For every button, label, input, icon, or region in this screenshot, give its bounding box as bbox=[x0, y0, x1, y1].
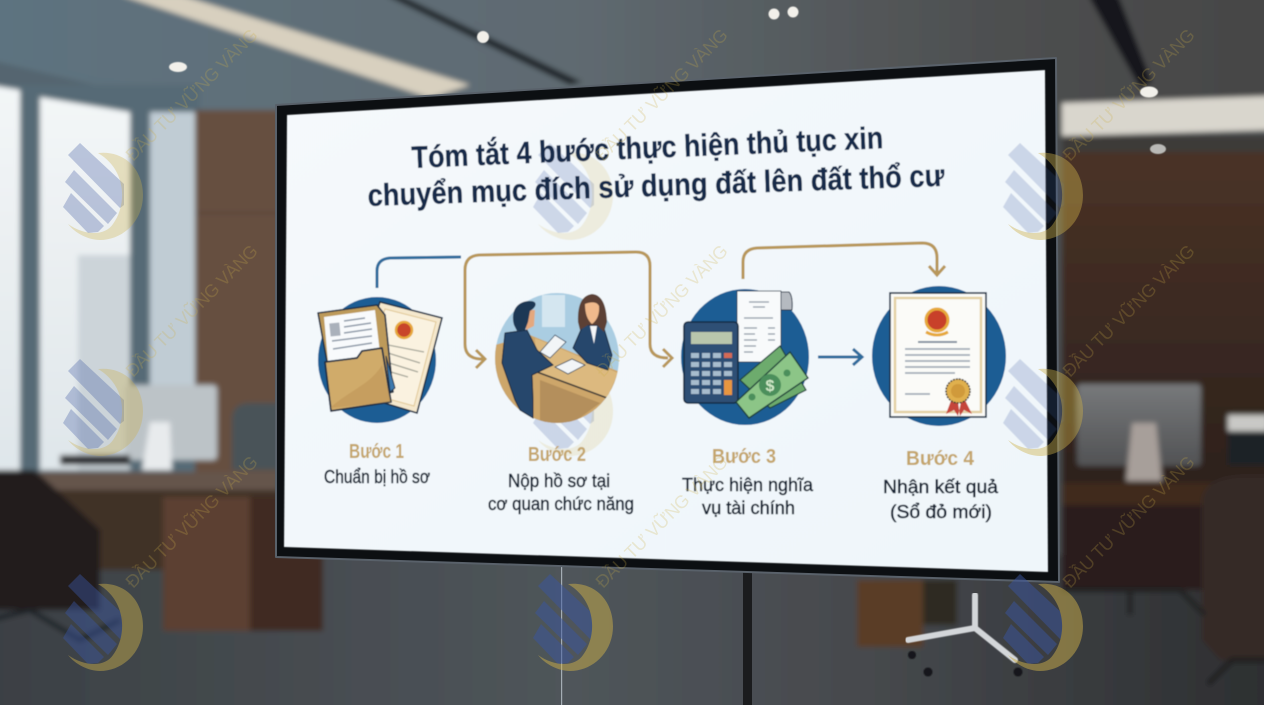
arrow: gold connector to step 4 bbox=[743, 243, 945, 279]
icon: step 3 calculator, receipt and money: $ bbox=[766, 378, 775, 395]
text block: step 1: Chuẩn bị hồ sơ bbox=[324, 466, 430, 487]
text block: step 4: Bước 4 bbox=[906, 448, 975, 470]
text block: step 2 bbox=[488, 444, 634, 514]
watermark: moon marks over right bezel bbox=[1008, 153, 1083, 456]
office chair base bbox=[908, 595, 1022, 676]
watermark: logo marks under screen content bbox=[63, 143, 1083, 671]
text block: step 2: cơ quan chức năng bbox=[488, 493, 634, 514]
title bbox=[367, 119, 945, 213]
text block: step 4: Nhận kết quả bbox=[883, 476, 999, 497]
watermark: repeated diagonal text: ĐẦU TƯ VỮNG VÀNG bbox=[591, 240, 732, 381]
ceiling spot lights bbox=[169, 6, 1166, 154]
watermark: repeated diagonal text: ĐẦU TƯ VỮNG VÀNG bbox=[591, 24, 732, 165]
title: chuyển mục đích sử dụng đất lên đất thổ cư bbox=[367, 158, 945, 213]
watermark: repeated diagonal text: ĐẦU TƯ VỮNG VÀNG bbox=[1058, 240, 1199, 381]
arrow: blue arrow step 3 to step 4 bbox=[818, 349, 862, 365]
watermark: repeated diagonal text bbox=[121, 24, 1199, 592]
watermark: repeated diagonal text: ĐẦU TƯ VỮNG VÀNG bbox=[121, 240, 262, 381]
watermark: repeated diagonal text: ĐẦU TƯ VỮNG VÀNG bbox=[121, 451, 262, 592]
watermark: repeated diagonal text: ĐẦU TƯ VỮNG VÀNG bbox=[1058, 451, 1199, 592]
text block: step 2: Nộp hồ sơ tại bbox=[508, 470, 610, 491]
text block: step 4 bbox=[883, 448, 999, 522]
icon: step 4 certificate with seal bbox=[872, 286, 1006, 426]
panel: screen bbox=[284, 70, 1064, 572]
text block: step 1 bbox=[324, 441, 430, 487]
text block: step 4: (Sổ đỏ mới) bbox=[890, 501, 992, 522]
text block: step 1: Bước 1 bbox=[349, 441, 404, 463]
watermark: repeated diagonal text: ĐẦU TƯ VỮNG VÀNG bbox=[1058, 24, 1199, 165]
arrow: blue connector from step 1 bbox=[377, 257, 461, 288]
display bezel bbox=[276, 58, 1059, 582]
display stand poles bbox=[561, 565, 752, 705]
text block: step 3: Thực hiện nghĩa bbox=[682, 474, 814, 495]
watermark: repeated diagonal text: ĐẦU TƯ VỮNG VÀNG bbox=[591, 451, 732, 592]
arrow: gold connector to step 2 and step 3 bbox=[465, 252, 672, 368]
icon: step 1 folder and certificate bbox=[318, 297, 442, 423]
text block: step 3 bbox=[682, 446, 814, 518]
icon: step 2 two people at service counter bbox=[495, 293, 620, 430]
text block: step 3: Bước 3 bbox=[712, 446, 776, 468]
text block: step 3: vụ tài chính bbox=[702, 497, 795, 518]
icon: step 3 calculator, receipt and money bbox=[681, 289, 809, 425]
title: Tóm tắt 4 bước thực hiện thủ tục xin bbox=[411, 119, 884, 175]
watermark: repeated diagonal text: ĐẦU TƯ VỮNG VÀNG bbox=[121, 24, 262, 165]
text block: step 2: Bước 2 bbox=[528, 444, 586, 466]
watermark: logo marks on the screen bbox=[533, 143, 1064, 456]
